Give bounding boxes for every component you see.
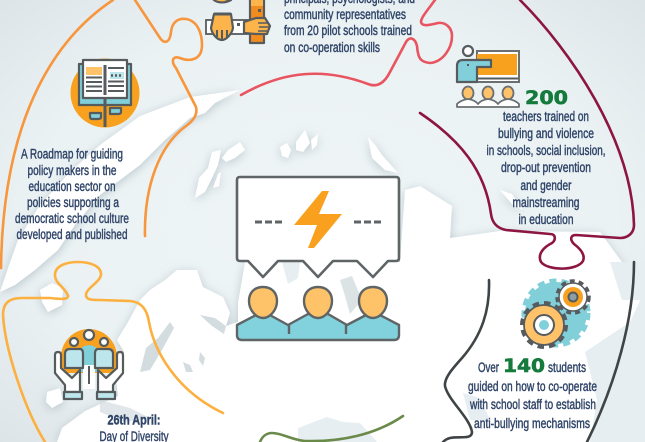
puzzle outline: orange roadmap piece xyxy=(1,0,202,268)
seas xyxy=(100,276,362,422)
text: over 140 students: students xyxy=(548,360,586,375)
text: teachers trained: in schools, social inclusion, xyxy=(486,143,606,158)
text: teachers trained: bullying and violence xyxy=(498,126,594,141)
puzzle outline: maroon piece xyxy=(420,0,634,269)
puzzle outline: green piece xyxy=(260,416,403,442)
number: 200 teachers: 200 xyxy=(525,87,568,109)
text: roadmap: developed and published xyxy=(16,227,128,242)
world map xyxy=(0,90,645,442)
icon: gears xyxy=(522,281,589,347)
text: roadmap: policy makers in the xyxy=(28,163,116,178)
icon: three people xyxy=(237,287,399,340)
text: day of diversity xyxy=(100,412,169,442)
text: roadmap: democratic school culture xyxy=(15,211,129,226)
text: pilot schools: community representatives xyxy=(284,7,406,22)
text: over 140 students: anti-bullying mechanisms xyxy=(474,416,590,431)
text: teachers trained: teachers trained on xyxy=(503,109,589,124)
text: over 140 students xyxy=(468,355,597,431)
text: over 140 students: guided on how to co-operate xyxy=(468,379,597,394)
icon: hands holding people xyxy=(55,329,123,399)
text: over 140 students: 140 xyxy=(503,355,545,377)
text: roadmap: policies supporting a xyxy=(27,195,119,210)
text: pilot schools: on co-operation skills xyxy=(284,40,380,55)
text: teachers trained: drop-out prevention xyxy=(501,160,591,175)
text: teachers trained: in education xyxy=(518,212,574,227)
text: day of diversity: 26th April: xyxy=(108,412,160,428)
text: roadmap xyxy=(15,146,129,242)
puzzle outline: yellow piece xyxy=(3,262,223,442)
puzzle outline: dark grey piece xyxy=(443,262,634,442)
puzzle outline: red piece xyxy=(241,0,452,95)
text: teachers trained: mainstreaming xyxy=(512,195,580,210)
text: teachers trained xyxy=(486,109,606,227)
text: teachers trained: and gender xyxy=(520,178,572,193)
icon: speech bubble with lightning xyxy=(237,177,399,277)
text: roadmap: education sector on xyxy=(28,179,116,194)
icon: joined hands xyxy=(206,0,270,43)
icon: teacher and students xyxy=(457,46,519,107)
icon: open book roadmap xyxy=(70,58,140,128)
text: over 140 students: Over xyxy=(478,360,499,375)
text: roadmap: A Roadmap for guiding xyxy=(21,146,123,162)
text: pilot schools: from 20 pilot schools trained xyxy=(284,23,412,38)
text: over 140 students: with school staff to establish xyxy=(469,397,596,412)
text: pilot schools xyxy=(284,0,415,55)
